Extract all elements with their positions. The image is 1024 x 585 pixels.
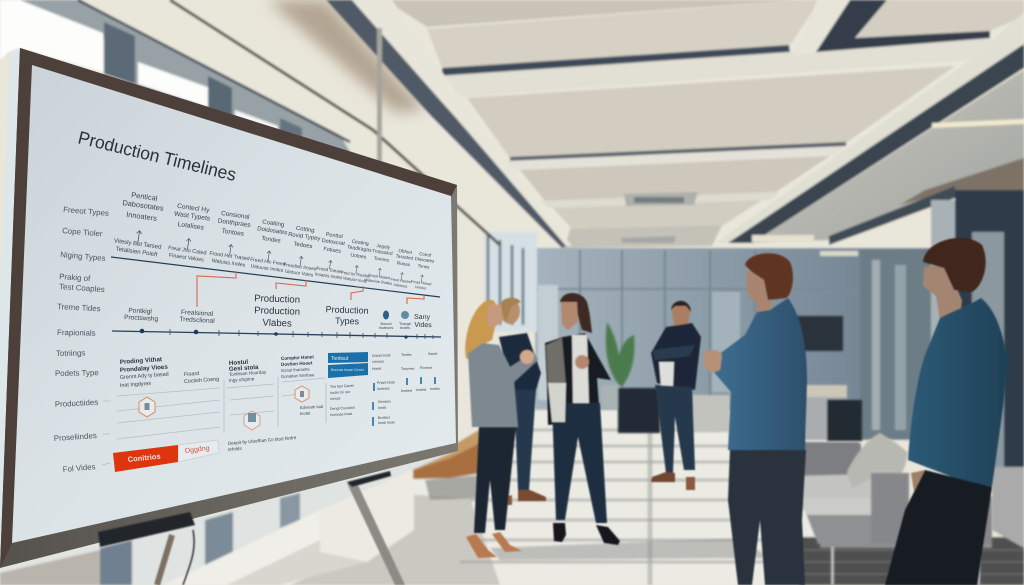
right column details: Geniton xyxy=(378,400,391,404)
mid-section labels: Bonod xyxy=(381,322,391,326)
suspension pole xyxy=(377,28,382,168)
lower block: Producing Videos: Coctish Coeng xyxy=(184,377,219,385)
timeline milestone 4: Tondes xyxy=(261,236,281,245)
bottom caption: Deepit fiy Uloefhan Co titod hinfre xyxy=(228,435,297,446)
lower block: Hostul xyxy=(229,359,267,383)
floor by sill xyxy=(227,540,367,585)
timeline milestone 3: Watuiss Inoles xyxy=(211,258,246,269)
ceiling rail xyxy=(170,0,500,245)
right column details: Dengl Conodint xyxy=(330,406,355,411)
back-of-room furniture xyxy=(601,316,862,441)
door frame on column xyxy=(972,232,1004,467)
left row labels: Podets Type xyxy=(55,368,99,378)
person: long-haired presenter xyxy=(545,293,620,545)
left clamp xyxy=(98,512,195,547)
lower block: Producing Videos: Prondalay Vioes xyxy=(120,364,169,374)
right column details: ininost xyxy=(330,396,340,401)
blue header boxes: Bonnas Insae Gonet xyxy=(331,368,364,372)
timeline milestone 6: Frood Toeael xyxy=(316,266,343,274)
call to action buttons: Oggdng xyxy=(184,445,210,455)
timeline milestone 4: Freed Hlc Freed xyxy=(250,257,286,268)
floor xyxy=(270,410,830,585)
timeline milestone 2: Lotalises xyxy=(177,221,205,232)
right ceiling beam xyxy=(716,12,1024,243)
right column details: Inoteies xyxy=(377,387,390,391)
upper left window band xyxy=(20,0,360,168)
timeline milestone 10: Tones xyxy=(417,263,431,270)
right column details: Hoteit xyxy=(372,367,381,371)
mid-section labels: Proctswshg xyxy=(124,314,159,323)
timeline milestone 9: Udetoes xyxy=(393,283,408,289)
timeline milestone 3: Tontoes xyxy=(221,228,244,238)
timeline milestone 2: Contecl Hy xyxy=(177,203,210,214)
timeline milestone 5: Rovid Typey xyxy=(288,232,321,242)
right column details: Uetocis xyxy=(372,360,384,364)
timeline milestone 4 xyxy=(249,219,291,274)
timeline milestone 5: Tedoes xyxy=(293,242,313,250)
side cabinet xyxy=(805,385,862,441)
timeline milestone 1: Vitesly Bet Tarsed xyxy=(114,238,162,251)
lower block: Producing Videos xyxy=(120,356,219,389)
board frame top xyxy=(0,48,457,568)
right column details: Inotes xyxy=(430,387,440,391)
board content xyxy=(54,127,441,474)
timeline milestone 1: Dabosotates xyxy=(122,198,165,213)
right column details: The fanl Ganet xyxy=(330,384,354,389)
lower block: Complor: Complor Hanet xyxy=(281,354,314,361)
timeline milestone 8: Frosit Hased xyxy=(368,273,390,280)
upper left window panes xyxy=(78,0,350,142)
plant xyxy=(606,322,634,386)
right low wall xyxy=(992,467,1024,548)
lower block: Hostul: Tonthsan Hourday xyxy=(229,369,267,377)
mid-section labels: Tredsclional xyxy=(179,316,215,325)
table grid lines xyxy=(102,377,326,465)
timeline milestone 8: Jogoly xyxy=(376,243,391,251)
right clamp xyxy=(347,471,391,487)
left row labels: Freeot Types xyxy=(63,205,109,218)
mid-section labels: Production xyxy=(254,293,300,306)
ceiling light strip xyxy=(932,119,1024,128)
timeline milestone 6: Fotises xyxy=(323,246,341,255)
timeline milestone 6: Dotoscrat xyxy=(321,238,346,247)
mid-section labels: Vlabes xyxy=(262,317,292,330)
lower block: Complor: Gonatlan Snsthee xyxy=(281,372,315,379)
timeline milestone 5: Uietuor Voles xyxy=(284,269,314,279)
dark soffit band xyxy=(829,186,955,245)
right column details: Brotites xyxy=(378,416,390,420)
timeline milestone 8: Tonoes xyxy=(373,256,390,264)
mid-section labels: Pontkigl xyxy=(128,307,153,316)
mid-section labels: Sany xyxy=(414,314,431,321)
timeline milestone 9: Tarasted xyxy=(395,253,414,261)
left white ceiling beam xyxy=(352,0,572,246)
mid-section labels: Production xyxy=(325,304,369,316)
board side edge xyxy=(0,48,20,568)
right ceiling panel xyxy=(752,70,1024,243)
mid-section labels: Tharge xyxy=(399,322,411,326)
timeline milestone 5 xyxy=(282,225,322,279)
dark low cabinet xyxy=(618,388,660,433)
mid-section labels xyxy=(124,293,432,330)
lower block: Hostul: Ingy ofrgrine xyxy=(229,376,255,383)
timeline milestone 1: Tetalisien Poieft xyxy=(115,247,158,258)
cable xyxy=(183,530,194,585)
timeline milestone 4: Coatiing xyxy=(262,219,285,229)
timeline milestone 9 xyxy=(390,248,416,289)
person: man in teal shirt xyxy=(885,238,1008,585)
wall TV xyxy=(796,316,843,351)
right column details: Sanet xyxy=(428,352,437,356)
right soffit xyxy=(900,158,1024,205)
lower block: Hostul: Gesl stola xyxy=(229,364,259,373)
window sill xyxy=(163,510,320,585)
right column details: Inotied xyxy=(401,389,412,393)
right column details: Fioonot xyxy=(420,366,432,370)
wooden bench xyxy=(413,428,482,500)
timeline milestone 8: Watovise Rodes xyxy=(364,278,392,286)
left row labels xyxy=(54,205,109,474)
right column details: Inosioas inoat xyxy=(330,412,352,417)
timeline milestone 10 xyxy=(410,251,436,291)
wall post xyxy=(452,210,484,445)
right column details: Ional Inote xyxy=(378,420,395,425)
timeline milestone 4: Uatuuse Inoles xyxy=(250,263,284,274)
person: arms crossed at back xyxy=(651,301,701,490)
board screen xyxy=(12,65,456,543)
icon: hexagon 3 xyxy=(295,386,309,402)
right column details: Tontes xyxy=(401,353,412,357)
icon: small blue pins xyxy=(373,377,435,426)
person: man in blue jacket xyxy=(703,253,807,585)
left easel leg xyxy=(157,535,172,585)
timeline milestone 9: Roeas xyxy=(397,260,411,267)
timeline milestone 5: Cotting xyxy=(295,226,315,234)
back sofa xyxy=(692,395,730,432)
planter xyxy=(601,385,619,409)
rug xyxy=(768,537,1024,585)
right column details: Inotd xyxy=(378,406,386,410)
bottom caption: orfolds xyxy=(228,446,243,452)
timeline milestone 10: Uetoes xyxy=(415,285,427,290)
easel and clamps xyxy=(98,471,405,585)
title: Production Timelines xyxy=(76,127,238,185)
left row labels: Cope Tioler xyxy=(62,226,103,239)
timeline milestone 8: Trotisoled xyxy=(372,248,393,257)
icon: hexagon 1 xyxy=(139,397,155,417)
icon: blue badges xyxy=(383,310,409,320)
red connector lines xyxy=(197,272,424,307)
timeline milestone 1: Pentical xyxy=(131,190,158,203)
timeline milestone 7: Fred lia Theshel xyxy=(341,270,371,279)
lower block: Producing Videos: Proding Vithat xyxy=(120,356,162,366)
back glass wall xyxy=(535,235,955,440)
right column details: Prtad Inoat xyxy=(377,380,395,385)
timeline milestone 6: Inoatos Inoles xyxy=(315,271,343,280)
timeline milestone 9: Freot Hazeel xyxy=(390,277,412,284)
mid-section labels: Types xyxy=(335,316,360,326)
ceiling air vents xyxy=(621,0,1024,243)
timeline milestone 2: Wast Typets xyxy=(174,211,211,223)
right ceiling vent xyxy=(728,44,1024,243)
timeline milestone 3: Frood Het Trased xyxy=(209,251,250,262)
bottom caption xyxy=(228,435,297,452)
timeline milestone 3: Donthpraes xyxy=(217,217,251,229)
lower block: Complor xyxy=(281,354,323,416)
timeline milestone 10: Frcad Haesd xyxy=(411,280,432,286)
people xyxy=(465,238,1008,585)
pale panel beside column xyxy=(931,200,955,440)
timeline milestone 7 xyxy=(340,238,375,284)
lower block: Hostul: Hostul xyxy=(229,359,249,367)
person: behind woman xyxy=(499,298,546,505)
call to action buttons: Conitrios xyxy=(127,452,161,464)
timeline milestone 7: Uotoes xyxy=(350,252,367,261)
left row labels: Prakig of xyxy=(59,272,91,283)
mid-section labels: Vides xyxy=(414,322,432,329)
timeline milestone 7: Watuiar Inole xyxy=(343,275,368,284)
timeline milestone 8 xyxy=(364,242,397,286)
left ceiling vent xyxy=(326,0,570,248)
ceiling panels xyxy=(385,0,995,248)
timeline milestone 6: Ponttol xyxy=(325,232,343,240)
timeline milestone 10: Cotrof xyxy=(419,251,432,258)
mid-section labels: Inoles xyxy=(400,326,410,330)
timeline milestone 10: Dlasoates xyxy=(414,256,435,264)
timeline milestone 2: Finaest Valoes xyxy=(168,253,204,263)
blue header boxes: Tontisut xyxy=(331,356,349,362)
left row labels: Test Coaples xyxy=(59,282,105,294)
windows under board xyxy=(0,450,458,585)
right column details: Inoted xyxy=(416,388,426,392)
timeline milestone 2 xyxy=(167,202,213,264)
lower block: Complor: Inotet xyxy=(300,410,311,416)
left corner windows xyxy=(483,232,537,332)
left row labels: Totriings xyxy=(56,348,85,358)
timeline milestone 7: Teadlragas xyxy=(347,244,372,254)
dark column xyxy=(955,190,1024,470)
upper left white window xyxy=(0,0,103,72)
timeline milestone 6 xyxy=(315,231,349,280)
left row labels: Treme Tides xyxy=(57,302,101,313)
lower block: Producing Videos: Grennt Ady ty basad xyxy=(120,372,169,381)
right column details: Dotod Inoal xyxy=(372,353,391,358)
right column details: Tonvoes xyxy=(401,367,415,371)
right column details: Inoter toi oet xyxy=(330,390,350,395)
mid-section labels: Production xyxy=(254,305,300,318)
lower block: Complor: Edveatn tual xyxy=(300,404,323,410)
call to action buttons xyxy=(113,440,219,472)
timeline milestone 1 xyxy=(112,189,169,259)
lower block: Producing Videos: Fioard xyxy=(184,371,199,378)
display board xyxy=(0,48,458,568)
blue header boxes xyxy=(328,352,368,378)
timeline milestone 1: Innoaters xyxy=(126,210,158,223)
timeline milestone 3 xyxy=(208,209,256,269)
left row labels: Niging Types xyxy=(60,250,106,263)
sofa xyxy=(794,433,992,585)
timeline milestone 2: Freat Jtto Cated xyxy=(168,245,207,257)
board frame xyxy=(0,48,458,568)
mid-section labels: Inoteues xyxy=(379,326,393,330)
left row labels: Fol Vides xyxy=(62,462,96,474)
left wall beige shading xyxy=(268,0,425,112)
timeline milestone 5: Freudise Iresed xyxy=(283,262,317,273)
lower timeline xyxy=(112,329,441,339)
upper timeline line xyxy=(111,257,440,297)
timeline milestone 3: Consional xyxy=(221,210,250,221)
timeline milestone 7: Ceating xyxy=(351,239,369,247)
lower block: Complor: Dovtion Hooet xyxy=(281,360,313,367)
mid-section labels: Frealsional xyxy=(181,309,214,318)
lower block: Complor: Gonal tharasha xyxy=(281,366,310,373)
person: woman in grey blazer xyxy=(465,300,538,558)
right column details xyxy=(330,352,440,425)
icon: hexagon 2 xyxy=(244,411,260,430)
left row labels: Proseliindes xyxy=(54,431,97,443)
timeline milestone 4: Doidosates xyxy=(257,226,288,236)
right easel leg xyxy=(347,483,405,585)
lower block: Producing Videos: Inat Ingdyres xyxy=(120,381,152,389)
left row labels: Frapionials xyxy=(57,328,96,338)
left row labels: Productiides xyxy=(55,398,99,409)
white cabinet xyxy=(320,467,414,562)
timeline milestone 9: Obfoet xyxy=(398,248,413,255)
